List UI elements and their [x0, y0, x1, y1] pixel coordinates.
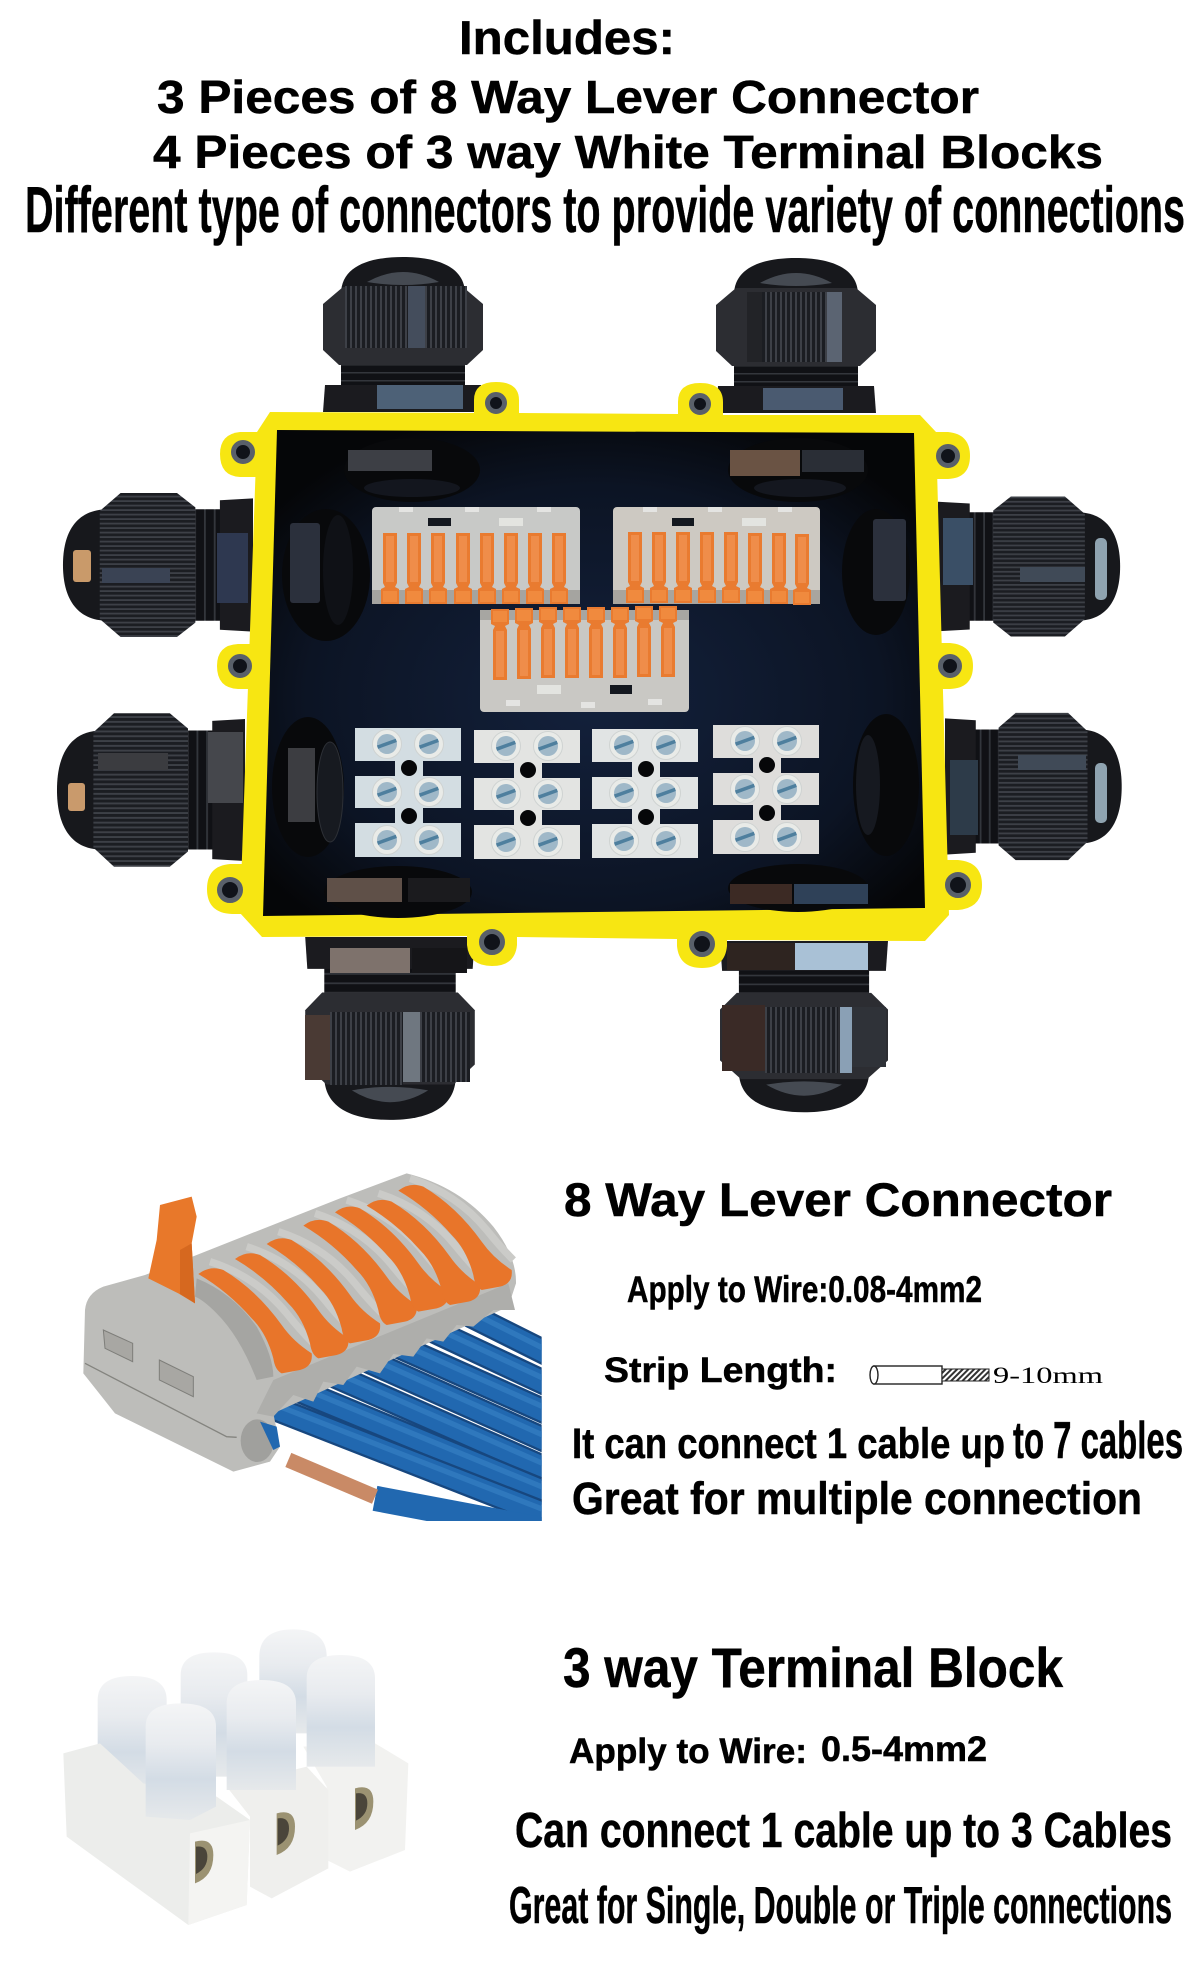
tower 3 — [181, 1652, 247, 1777]
terminal block: column 4 — [713, 725, 819, 854]
rear tower — [259, 1629, 327, 1733]
yellow box rim with screw ears — [207, 382, 982, 968]
junction box illustration — [57, 257, 1122, 1120]
wire range value: 0.5-4mm2 — [821, 1730, 987, 1769]
internal lock nuts — [272, 438, 919, 918]
wire strip diagram — [870, 1366, 989, 1384]
photo: 3 way terminal block — [63, 1629, 408, 1925]
orange levers — [198, 1185, 512, 1373]
terminal block: column 3 — [592, 729, 698, 858]
raised orange lever — [148, 1197, 197, 1303]
cable gland: top right — [716, 258, 876, 413]
heading: terminal block quantity: 4 Pieces of 3 way White Terminal Blocks — [153, 126, 1103, 178]
tower 4 — [227, 1680, 296, 1790]
screws in the ears — [220, 394, 968, 954]
wire openings — [195, 1787, 373, 1883]
blue wires — [274, 1313, 542, 1521]
benefit line: Great for multiple connection — [572, 1473, 1142, 1524]
lever connector: top left — [372, 507, 580, 604]
cable gland: left lower — [57, 713, 245, 867]
photo: 8 way lever connector — [83, 1173, 560, 1533]
cable gland: left upper — [63, 493, 253, 637]
wire entry ledge — [257, 1283, 515, 1417]
block A — [63, 1743, 250, 1925]
cable gland: bottom right — [720, 941, 888, 1112]
lever ridges — [210, 1178, 513, 1343]
box interior — [263, 430, 925, 916]
terminal block: column 1 — [355, 728, 461, 857]
strip length label: Strip Length: — [604, 1351, 837, 1390]
heading: 3 way Terminal Block — [563, 1636, 1064, 1699]
capacity line: It can connect 1 cable up — [572, 1420, 1005, 1468]
connector body — [83, 1173, 516, 1472]
lever connector: centre, inverted — [480, 606, 689, 712]
block B — [227, 1767, 328, 1898]
wire range: Apply to Wire:0.08-4mm2 — [627, 1269, 982, 1310]
section: terminal block text — [509, 1636, 1172, 1935]
tower 1 — [98, 1676, 167, 1793]
tower 2 — [146, 1703, 216, 1820]
block A end face — [188, 1820, 250, 1925]
wire range label: Apply to Wire: — [569, 1732, 807, 1771]
block C — [303, 1743, 408, 1872]
wire hole — [241, 1419, 280, 1462]
lever connector: top right — [613, 507, 820, 605]
cable gland: top left — [323, 257, 483, 412]
tower 6 — [307, 1655, 375, 1767]
title: includes: Includes: — [459, 11, 675, 64]
body seam — [85, 1363, 237, 1437]
side slots — [103, 1330, 193, 1397]
stripped copper wire — [288, 1460, 375, 1497]
terminal block: column 2 — [474, 730, 580, 859]
cable gland: right lower — [945, 713, 1122, 860]
concave recess beside levers — [195, 1278, 273, 1380]
heading: 8 way lever connector quantity: 3 Pieces of 8 Way Lever Connector — [157, 71, 979, 123]
strip length value: 9-10mm — [993, 1363, 1103, 1388]
heading: 8 Way Lever Connector — [564, 1173, 1112, 1226]
section: lever connector text — [564, 1173, 1183, 1524]
cable gland: right upper — [938, 496, 1120, 636]
cable gland: bottom left — [305, 937, 475, 1120]
